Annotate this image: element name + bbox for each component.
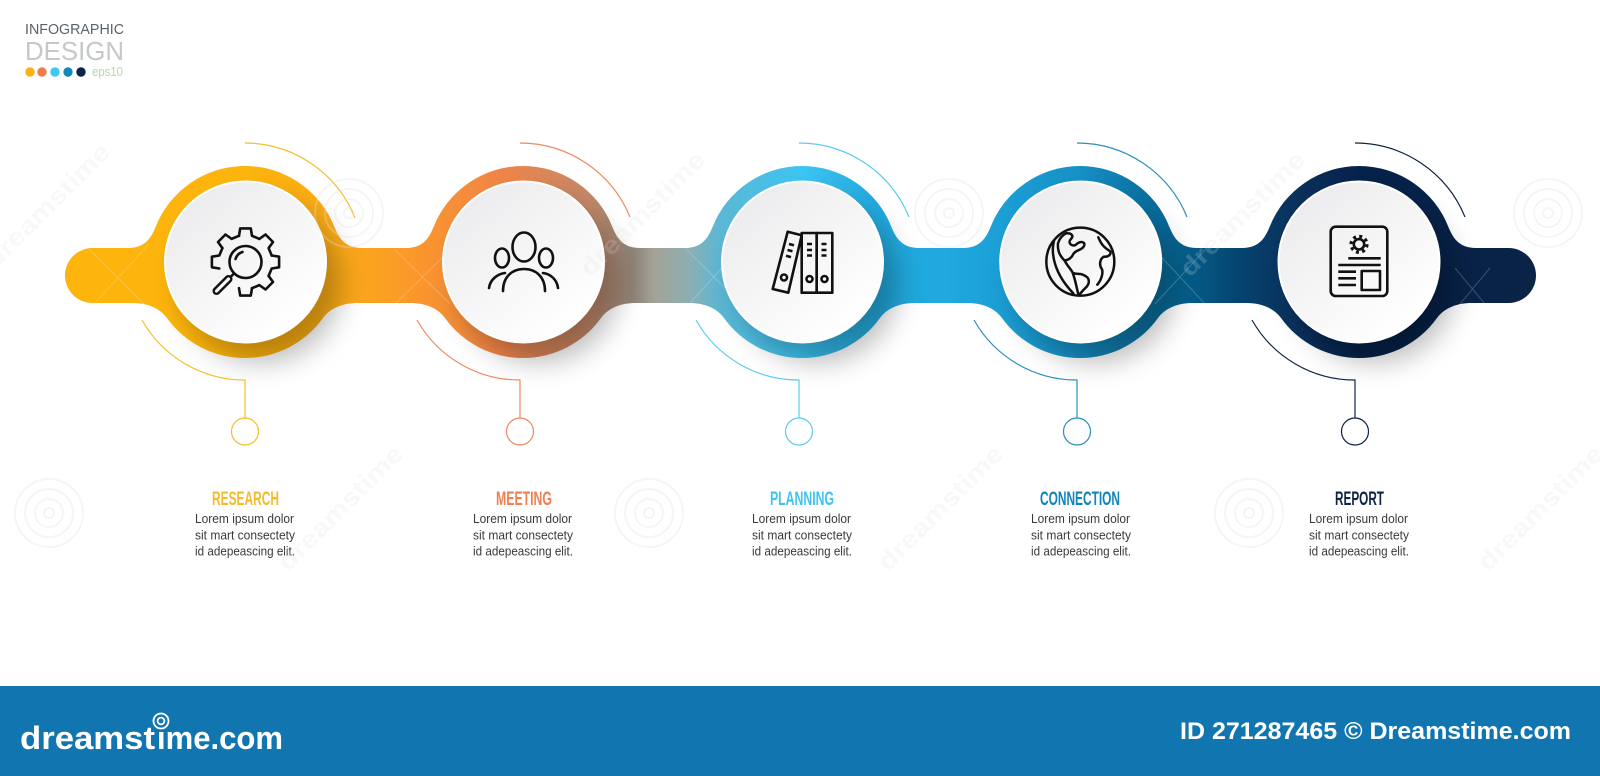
connector arcs: [696, 143, 909, 445]
description: id adepeascing elit.: [195, 544, 295, 558]
step 5: report: [1252, 143, 1465, 558]
watermark overlay: dreamstime: [1472, 440, 1600, 576]
step 1: research: [142, 143, 355, 558]
step 3: planning: [696, 143, 909, 558]
footer brand: dreamstime.com: ime.com: [157, 720, 283, 756]
watermark overlay: dreamstime: [272, 440, 409, 576]
connector arcs: [974, 143, 1187, 445]
description: sit mart consectety: [473, 528, 573, 542]
heading: RESEARCH: [212, 489, 279, 510]
step 4: connection: [974, 143, 1187, 558]
footer bar: [0, 686, 1600, 776]
logo line: INFOGRAPHIC: INFOGRAPHIC: [25, 21, 124, 38]
footer brand spiral: [154, 714, 168, 728]
logo line: DESIGN: DESIGN: [25, 36, 124, 66]
disc: [1278, 182, 1440, 342]
watermark overlay: dreamstime: [574, 146, 711, 282]
description: sit mart consectety: [1309, 528, 1409, 542]
disc: [165, 182, 326, 342]
connector arcs: [142, 143, 355, 445]
description: sit mart consectety: [752, 528, 852, 542]
description: Lorem ipsum dolor: [752, 511, 852, 526]
connector arcs: [1252, 143, 1465, 445]
watermark overlay: dreamstime: [1174, 146, 1311, 282]
disc: [1000, 182, 1161, 342]
footer image id: ID 271287465 © Dreamstime.com: [1180, 718, 1571, 745]
heading: PLANNING: [770, 489, 834, 510]
description: Lorem ipsum dolor: [195, 511, 295, 526]
heading: MEETING: [496, 489, 552, 510]
watermark overlay: dreamstime: [872, 440, 1009, 576]
description: Lorem ipsum dolor: [1031, 511, 1131, 526]
icon: globe: [1046, 228, 1114, 296]
heading: CONNECTION: [1040, 489, 1120, 510]
heading: REPORT: [1335, 489, 1384, 510]
description: id adepeascing elit.: [752, 544, 852, 558]
disc: [722, 182, 883, 342]
timeline band: [65, 166, 1536, 358]
connector arcs: [417, 143, 630, 445]
disc shadows: [181, 202, 1455, 362]
logo: infographic design: [25, 21, 124, 79]
disc: [443, 182, 604, 342]
description: id adepeascing elit.: [473, 544, 573, 558]
footer brand: dreamstime.com: dreamst: [20, 720, 155, 756]
icon: gear with magnifier: [212, 228, 279, 296]
logo note: eps10: eps10: [92, 64, 123, 79]
description: id adepeascing elit.: [1031, 544, 1131, 558]
description: Lorem ipsum dolor: [473, 511, 573, 526]
logo colour dots: [25, 67, 86, 77]
step 2: meeting: [417, 143, 630, 558]
description: Lorem ipsum dolor: [1309, 511, 1409, 526]
icon: people: [489, 232, 558, 291]
icon: binders: [773, 232, 832, 293]
description: id adepeascing elit.: [1309, 544, 1409, 558]
icon: report document: [1331, 227, 1387, 296]
description: sit mart consectety: [1031, 528, 1131, 542]
watermark overlay: [0, 138, 1600, 576]
description: sit mart consectety: [195, 528, 295, 542]
